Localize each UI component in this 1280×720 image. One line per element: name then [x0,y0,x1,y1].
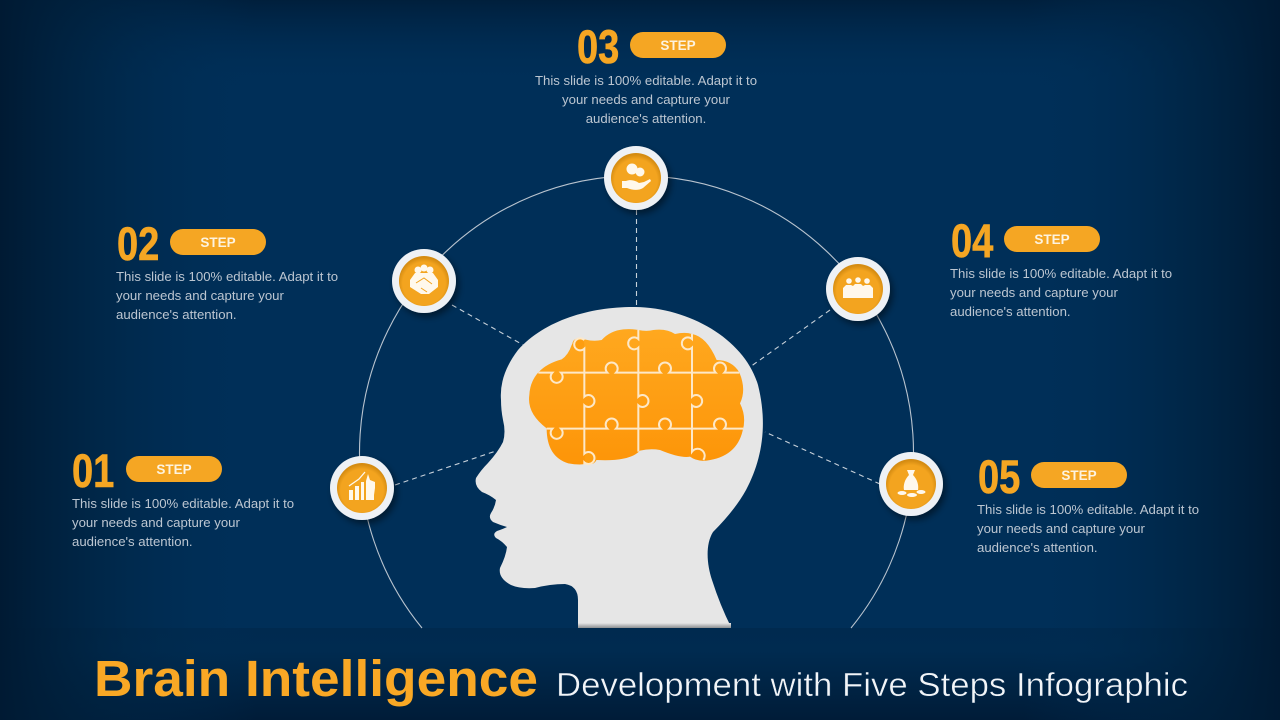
semicircular arc connecting the steps [360,176,914,628]
number 03: 03 [577,21,619,74]
number 05: 05 [978,451,1020,504]
head shape [476,307,763,627]
text 04: This slide is 100% editable. Adapt it to [950,266,1172,281]
pill 01 [126,456,222,482]
step 03 [535,21,757,126]
text 05: This slide is 100% editable. Adapt it to [977,502,1199,517]
step 01 [72,445,294,549]
puzzle seams [538,330,743,465]
text 02: This slide is 100% editable. Adapt it to [116,269,338,284]
pill 02: STEP [200,235,236,250]
number 02: 02 [117,218,159,271]
text 03: This slide is 100% editable. Adapt it to [535,73,757,88]
footer band [0,628,1280,720]
text 05: audience's attention. [977,540,1098,555]
outer puzzle knobs [552,338,597,464]
title light part: Development with Five Steps Infographic [556,666,1188,703]
pill 04 [1004,226,1100,252]
text 05: your needs and capture your [977,521,1145,536]
pill 02 [170,229,266,255]
dashed connector lines [395,210,880,485]
text 02: your needs and capture your [116,288,284,303]
pill 03: STEP [660,38,696,53]
pill 05 [1031,462,1127,488]
brain shape [529,329,744,464]
step 02 [116,218,338,322]
pill 03 [630,32,726,58]
title [94,650,1188,707]
text 03: audience's attention. [586,111,706,126]
pill 05: STEP [1061,468,1097,483]
node 01: growth chart icon [330,456,394,520]
step 05 [977,451,1199,555]
node 03: hand with gears icon [604,146,668,210]
node 02: team handshake icon [392,249,456,313]
pill 04: STEP [1034,232,1070,247]
head silhouette with puzzle brain [476,307,763,628]
pill 01: STEP [156,462,192,477]
orange jigsaw brain [529,329,744,465]
title bold part: Brain Intelligence [94,650,538,707]
node 05: money bag icon [879,452,943,516]
text 02: audience's attention. [116,307,237,322]
text 01: audience's attention. [72,534,193,549]
node 04: group of people icon [826,257,890,321]
step 04 [950,215,1172,319]
text 01: your needs and capture your [72,515,240,530]
neck shading [578,623,731,628]
text 04: your needs and capture your [950,285,1118,300]
text 04: audience's attention. [950,304,1071,319]
number 04: 04 [951,215,994,268]
text 03: your needs and capture your [562,92,731,107]
text 01: This slide is 100% editable. Adapt it to [72,496,294,511]
number 01: 01 [72,445,114,498]
